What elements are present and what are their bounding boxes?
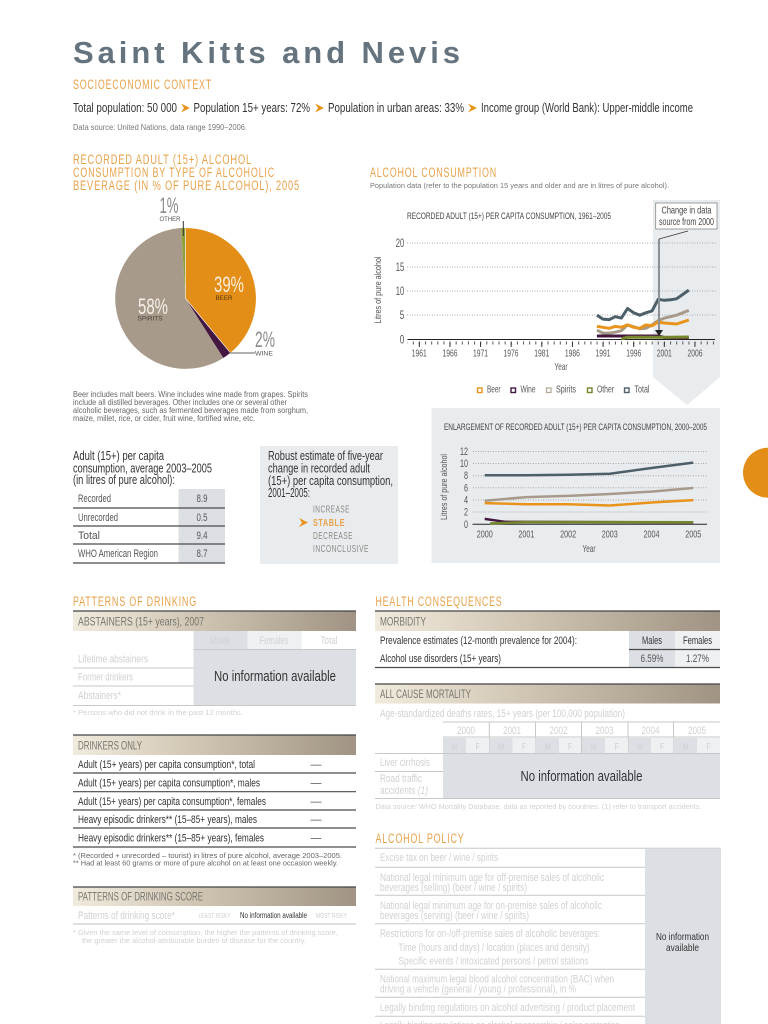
estimate options: INCREASE	[313, 504, 350, 516]
all cause mortality table: No information available	[520, 769, 642, 785]
drinkers only table: DRINKERS ONLY	[78, 738, 142, 752]
line chart: consumption 1961-2005: 10	[396, 286, 404, 298]
panel: patterns of drinking	[73, 594, 356, 945]
estimate question: 2001–2005:	[268, 486, 310, 500]
estimate options: INCONCLUSIVE	[313, 543, 369, 555]
morbidity table: MORBIDITY	[380, 614, 426, 628]
all cause mortality table: F	[706, 742, 710, 753]
line chart: consumption 1961-2005: 15	[396, 262, 404, 274]
policy list: beverages (selling) (beer / wine / spirits)	[380, 882, 527, 894]
panel: enlargement chart 2000-2005: Litres of pure alcohol	[439, 454, 450, 520]
abstainers table: Former drinkers	[78, 672, 133, 684]
patterns of drinking score: MOST RISKY	[316, 911, 347, 920]
panel: alcohol policy	[375, 831, 721, 1024]
line chart: consumption 1961-2005: 1976	[504, 348, 519, 360]
line chart: consumption 1961-2005: Litres of pure alcohol	[373, 256, 384, 324]
abstainers table: * Persons who did not drink in the past 12 months.	[73, 708, 243, 717]
drinkers only table: Heavy episodic drinkers** (15–85+ years), males	[78, 814, 257, 826]
estimate question: change in recorded adult	[268, 462, 370, 476]
pie labels: OTHER	[160, 216, 181, 223]
no information block: No information	[656, 931, 709, 943]
panel: enlargement chart 2000-2005: 12	[460, 446, 468, 458]
pie heading: CONSUMPTION BY TYPE OF ALCOHOLIC	[73, 165, 275, 180]
line chart: consumption 1961-2005: 5	[400, 310, 404, 322]
morbidity table: 1.27%	[686, 653, 709, 665]
policy list: Specific events / intoxicated persons / petrol stations	[398, 956, 589, 968]
chart legend	[478, 384, 650, 396]
estimate options: DECREASE	[313, 530, 353, 542]
beverage definition note	[73, 390, 308, 423]
enlargement data lines	[485, 463, 693, 524]
panel: health consequences	[375, 594, 720, 811]
heading: patterns of drinking: PATTERNS OF DRINKING	[73, 594, 197, 609]
abstainers table: ABSTAINERS (15+ years), 2007	[78, 614, 204, 628]
all cause mortality table: accidents (1)	[380, 785, 428, 797]
pie heading: BEVERAGE (IN % OF PURE ALCOHOL), 2005	[73, 178, 300, 193]
heading: socioeconomic context: SOCIOECONOMIC CONTEXT	[73, 77, 212, 92]
all cause mortality table: M	[637, 742, 643, 753]
table body: Recorded	[78, 493, 111, 505]
pie labels: SPIRITS	[138, 316, 162, 322]
panel: alcohol consumption	[370, 165, 720, 405]
abstainers table: Females	[260, 635, 289, 647]
beverage definition note: maize, millet, rice, or cider, fruit wine, fortified wine, etc.	[73, 414, 255, 423]
all cause mortality table: M	[682, 742, 688, 753]
heading: alcohol policy: ALCOHOL POLICY	[376, 831, 464, 846]
panel: enlargement chart 2000-2005: 0	[464, 519, 468, 531]
data lines	[597, 290, 689, 339]
pie labels: WINE	[255, 350, 274, 358]
beverage definition note: include all distilled beverages. Other includes one or several other	[73, 398, 287, 407]
morbidity table	[375, 611, 720, 668]
all cause mortality table: Age-standardized deaths rates, 15+ years (per 100,000 population)	[380, 708, 625, 720]
all cause mortality table: Road traffic	[380, 773, 422, 785]
population data note: Population data (refer to the population 15 years and older and are in litres of pure alcohol).	[370, 181, 669, 190]
table body: 9.4	[196, 530, 208, 542]
policy list: Restrictions for on-/off-premise sales of alcoholic beverages:	[380, 928, 600, 940]
morbidity table: Alcohol use disorders (15+ years)	[380, 653, 501, 665]
drinkers only table: —	[310, 814, 322, 826]
table heading	[73, 449, 212, 487]
abstainers table	[73, 611, 356, 717]
section: socioeconomic context	[73, 77, 693, 132]
table body	[73, 489, 225, 563]
panel: enlargement chart 2000-2005: 8	[464, 470, 468, 482]
morbidity table: Females	[683, 635, 712, 647]
patterns of drinking score: * Given the same level of consumption, the higher the patterns of drinking score,	[73, 928, 338, 937]
heading: health consequences: HEALTH CONSEQUENCES	[376, 594, 502, 609]
policy list: Excise tax on beer / wine / spirits	[380, 852, 498, 864]
pie heading: RECORDED ADULT (15+) ALCOHOL	[73, 152, 252, 167]
panel: enlargement chart 2000-2005: 10	[460, 458, 468, 470]
line chart: consumption 1961-2005: 1961	[412, 348, 427, 360]
pie labels: 58%	[138, 294, 168, 319]
all cause mortality table: 2001	[503, 725, 521, 737]
chart legend: Beer	[487, 384, 501, 396]
patterns of drinking score: Patterns of drinking score*	[78, 910, 176, 922]
drinkers only table: —	[310, 832, 322, 844]
decorative orange tab: half circle	[743, 448, 768, 498]
line chart: consumption 1961-2005: 20	[396, 238, 404, 250]
pie chart	[115, 193, 275, 369]
line chart: consumption 1961-2005: 1971	[473, 348, 488, 360]
pie labels: 2%	[255, 327, 275, 352]
patterns of drinking score	[73, 887, 356, 945]
all cause mortality table: 2003	[596, 725, 614, 737]
line chart: consumption 1961-2005: 0	[400, 334, 404, 346]
line chart: consumption 1961-2005	[373, 211, 716, 373]
all cause mortality table: F	[614, 742, 618, 753]
data source note: Data source: United Nations, data range 1990–2006.	[73, 123, 247, 132]
drinkers only table: ** Had at least 60 grams or more of pure alcohol on at least one occasion weekly.	[73, 858, 338, 868]
panel: enlargement chart 2000-2005: 2000	[477, 528, 493, 540]
all cause mortality table: Data source: WHO Mortality Database, data as reported by countries. (1) refer to transport accidents.	[376, 802, 702, 811]
pie labels	[138, 193, 275, 358]
all cause mortality table: 2000	[457, 725, 475, 737]
all cause mortality table: M	[498, 742, 504, 753]
panel: per capita consumption table	[73, 449, 225, 563]
callout: change in data source: Change in data	[662, 206, 712, 216]
all cause mortality table: F	[476, 742, 480, 753]
estimate options	[299, 504, 369, 555]
policy list: National maximum legal blood alcohol concentration (BAC) when	[380, 974, 614, 986]
callout: change in data source: source from 2000	[659, 217, 714, 228]
policy list: National legal minimum age for on-premise sales of alcoholic	[380, 900, 602, 912]
panel: enlargement chart 2000-2005: 2004	[644, 528, 660, 540]
all cause mortality table: 2004	[642, 725, 660, 737]
all cause mortality table: F	[522, 742, 526, 753]
all cause mortality table: 2005	[688, 725, 706, 737]
panel: pie chart by beverage	[73, 152, 308, 423]
line chart: consumption 1961-2005: 1986	[565, 348, 580, 360]
table body: Unrecorded	[78, 512, 118, 524]
line chart: consumption 1961-2005: 1966	[442, 348, 458, 360]
all cause mortality table: M	[590, 742, 596, 753]
no information block: available	[666, 942, 699, 954]
drinkers only table: * (Recorded + unrecorded – tourist) in litres of pure alcohol, average 2003–2005.	[73, 851, 342, 860]
all cause mortality table: M	[452, 742, 458, 753]
chart legend: Other	[597, 384, 614, 396]
policy list	[375, 848, 721, 1024]
patterns of drinking score: PATTERNS OF DRINKING SCORE	[78, 890, 203, 904]
estimate options: STABLE	[313, 517, 345, 529]
patterns of drinking score: LEAST RISKY	[198, 911, 230, 920]
table body: Total	[78, 530, 100, 542]
abstainers table: Total	[320, 635, 338, 647]
line chart: consumption 1961-2005: 1991	[596, 348, 611, 360]
table body: 8.7	[196, 548, 208, 560]
table body: 8.9	[196, 493, 208, 505]
line chart: consumption 1961-2005: 1981	[534, 348, 549, 360]
all cause mortality table: M	[544, 742, 550, 753]
panel: enlargement chart 2000-2005: 2005	[685, 528, 701, 540]
panel: enlargement chart 2000-2005: 2	[464, 506, 468, 518]
policy list: driving a vehicle (general / young / professional), in %	[380, 984, 576, 996]
chart legend: Total	[634, 384, 650, 396]
panel: robust estimate of change	[260, 446, 398, 564]
chart legend: Wine	[520, 384, 536, 396]
table heading: Adult (15+) per capita	[73, 449, 164, 463]
panel: enlargement chart 2000-2005	[432, 408, 720, 563]
pie labels: 39%	[214, 272, 244, 297]
patterns of drinking score: No information available	[240, 911, 307, 920]
pie labels: 1%	[160, 193, 178, 218]
population facts row: Total population: 50 000	[73, 101, 177, 115]
drinkers only table: Adult (15+ years) per capita consumption*, males	[78, 778, 260, 790]
patterns of drinking score: the greater the alcohol-attributable burden of disease for the country.	[82, 936, 306, 945]
drinkers only table: Adult (15+ years) per capita consumption*, total	[78, 759, 255, 771]
policy list: National legal minimum age for off-premise sales of alcoholic	[380, 872, 604, 884]
chart legend: Spirits	[556, 384, 576, 396]
pie labels: BEER	[216, 296, 233, 302]
line chart: consumption 1961-2005: Year	[554, 361, 568, 373]
drinkers only table	[73, 735, 356, 868]
panel: enlargement chart 2000-2005: 2001	[518, 528, 535, 540]
all cause mortality table: ALL CAUSE MORTALITY	[380, 687, 471, 701]
table body: WHO American Region	[78, 548, 158, 560]
pie heading	[73, 152, 300, 193]
population facts row: Population 15+ years: 72%	[194, 101, 310, 115]
policy list: Legally binding regulations on alcohol advertising / product placement	[380, 1002, 635, 1014]
morbidity table: Males	[642, 635, 662, 647]
policy list: beverages (serving) (beer / wine / spirits)	[380, 910, 529, 922]
drinkers only table: —	[310, 778, 322, 790]
all cause mortality table	[375, 684, 720, 811]
panel: enlargement chart 2000-2005: 6	[464, 482, 468, 494]
shaded change band with down arrow	[653, 200, 720, 405]
line chart: consumption 1961-2005: RECORDED ADULT (15+) PER CAPITA CONSUMPTION, 1961–2005	[407, 211, 611, 222]
estimate question	[268, 449, 393, 500]
heading: alcohol consumption: ALCOHOL CONSUMPTION	[370, 165, 497, 180]
drinkers only table: Adult (15+ years) per capita consumption*, females	[78, 796, 266, 808]
policy list: Time (hours and days) / location (places and density)	[398, 942, 590, 954]
panel: enlargement chart 2000-2005: Year	[582, 543, 596, 555]
drinkers only table: —	[310, 759, 322, 771]
all cause mortality table: F	[568, 742, 572, 753]
abstainers table: No information available	[214, 669, 336, 685]
panel: enlargement chart 2000-2005: 2002	[560, 528, 576, 540]
population facts row: Income group (World Bank): Upper-middle income	[481, 101, 693, 115]
all cause mortality table: Liver cirrhosis	[380, 757, 430, 769]
panel: enlargement chart 2000-2005: 4	[464, 494, 468, 506]
estimate question: Robust estimate of five-year	[268, 449, 383, 463]
line chart: consumption 1961-2005: 2006	[688, 348, 703, 360]
line chart: consumption 1961-2005: 1996	[626, 348, 641, 360]
population facts row	[73, 101, 693, 115]
morbidity table: 6.59%	[640, 653, 664, 665]
morbidity table: Prevalence estimates (12-month prevalence for 2004):	[380, 635, 577, 647]
all cause mortality table: F	[660, 742, 664, 753]
table heading: consumption, average 2003–2005	[73, 462, 212, 476]
line chart: consumption 1961-2005: 2001	[657, 348, 672, 360]
table body: 0.5	[196, 512, 208, 524]
callout: change in data source	[655, 203, 717, 336]
abstainers table: Lifetime abstainers	[78, 654, 148, 666]
population facts row: Population in urban areas: 33%	[328, 101, 464, 115]
drinkers only table: Heavy episodic drinkers** (15–85+ years), females	[78, 832, 264, 844]
drinkers only table: —	[310, 796, 322, 808]
beverage definition note: alcoholic beverages, such as fermented beverages made from sorghum,	[73, 406, 308, 415]
beverage definition note: Beer includes malt beers. Wine includes wine made from grapes. Spirits	[73, 390, 308, 399]
panel: enlargement chart 2000-2005: 2003	[602, 528, 618, 540]
title: Saint Kitts and Nevis	[73, 35, 460, 70]
estimate question: (15+) per capita consumption,	[268, 474, 393, 488]
all cause mortality table: 2002	[550, 725, 568, 737]
table heading: (in litres of pure alcohol):	[73, 473, 175, 487]
no information block	[645, 849, 721, 1024]
abstainers table: Males	[210, 635, 230, 647]
abstainers table: Abstainers*	[78, 690, 122, 702]
